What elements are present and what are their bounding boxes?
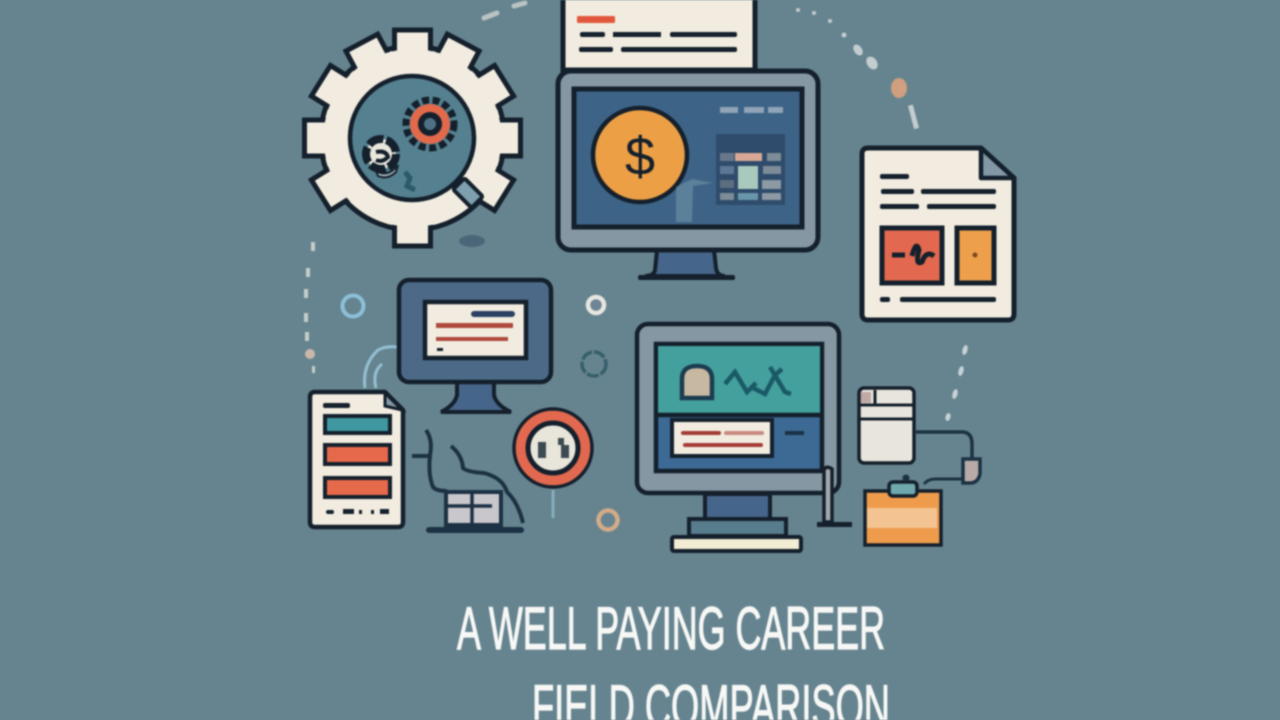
bezel (637, 324, 839, 493)
table (716, 134, 785, 205)
stand (672, 494, 801, 551)
screen (656, 344, 822, 471)
screen (425, 302, 526, 358)
red bar two (325, 478, 390, 497)
monitor: left document view (399, 280, 551, 412)
figure (676, 179, 713, 222)
bezel (399, 280, 551, 382)
screen lines (436, 311, 515, 351)
lock icon (682, 366, 712, 398)
dotted arc: left (304, 242, 315, 373)
gear shadow (459, 235, 485, 247)
small broken cog (366, 139, 398, 177)
desk with cables (412, 430, 524, 533)
screen (574, 89, 802, 227)
cloud line (365, 347, 398, 388)
server (859, 388, 914, 463)
teal bar (325, 416, 390, 433)
title (457, 595, 890, 720)
ring: dashed (582, 352, 606, 376)
fold (385, 393, 402, 410)
monitor: salary dollar (558, 71, 818, 280)
dotted arc: top right (796, 8, 919, 129)
small orange cog (406, 100, 454, 148)
magnifier handle (453, 178, 483, 208)
title: A WELL PAYING CAREER (457, 595, 885, 662)
ring: tan (598, 510, 618, 530)
text lines (579, 32, 737, 52)
stand (441, 382, 511, 412)
dotted arc: top left (484, 3, 525, 18)
desk lamp (817, 467, 852, 527)
screen labels (720, 107, 783, 113)
server icon with cable (859, 388, 980, 484)
briefcase (865, 474, 941, 545)
chart squiggle (725, 367, 791, 394)
cable (916, 432, 972, 460)
orange picture box (957, 228, 994, 283)
red bar one (325, 445, 390, 464)
dotted arc: lower right (945, 345, 969, 422)
icon: large gear with magnifier (304, 30, 520, 246)
monitor: chart (637, 324, 852, 551)
badge: red circle (514, 409, 592, 487)
inner card (672, 420, 772, 456)
mouse (963, 459, 980, 483)
red heading bar (577, 16, 615, 23)
small dash (785, 431, 804, 435)
coin: $ (625, 127, 655, 187)
stand (638, 250, 735, 280)
gear lens (350, 76, 474, 200)
coin (593, 108, 687, 202)
footer marks (326, 509, 389, 514)
document: left (310, 392, 403, 527)
bezel (558, 71, 818, 250)
document: right (862, 148, 1014, 320)
red picture box (882, 228, 942, 283)
ring: blue (342, 296, 364, 316)
document: top (563, 0, 755, 70)
badge stem (552, 490, 554, 518)
lens mark (405, 172, 415, 190)
ring: cream (588, 297, 604, 313)
folded corner (981, 148, 1014, 178)
text lines (880, 174, 996, 302)
heading (323, 403, 350, 408)
teal panel (658, 346, 820, 414)
